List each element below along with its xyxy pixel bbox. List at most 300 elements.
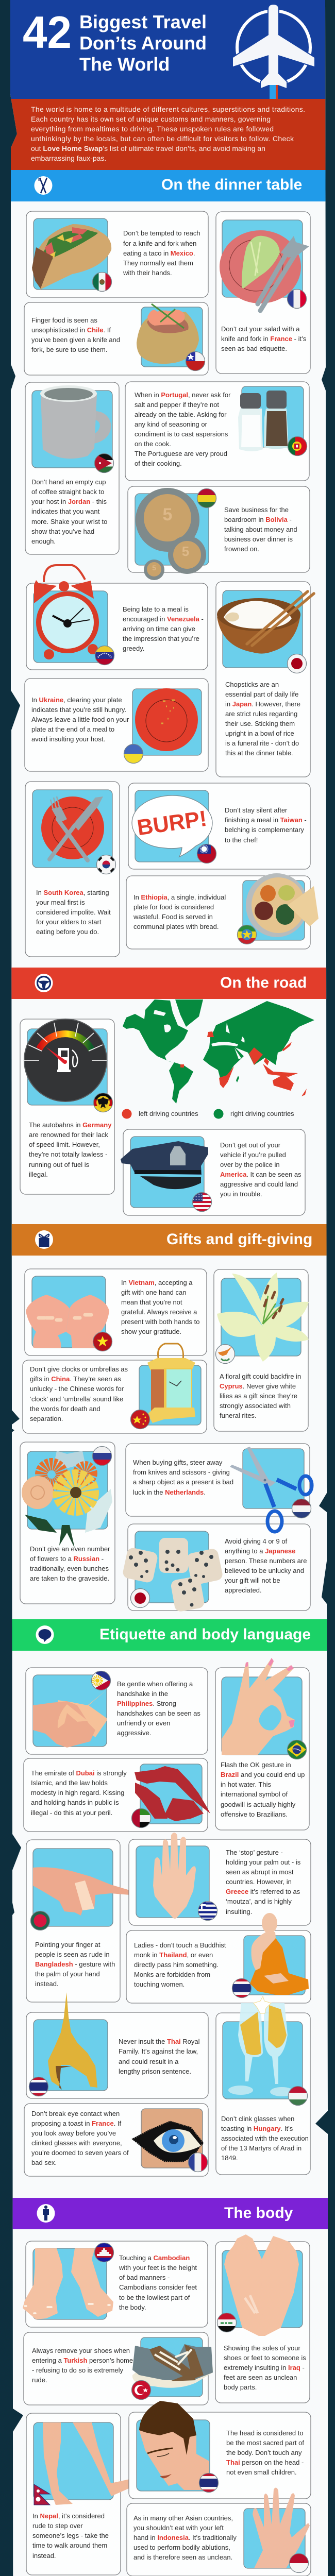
heading: Etiquette and body language: Etiquette and body language [99, 1626, 311, 1643]
text: A floral gift could backfire in [220, 1372, 301, 1380]
text: lengthy prison sentence. [119, 2067, 191, 2075]
text: international symbol of [221, 1790, 288, 1798]
text: The emirate of Dubai is strongly [31, 1769, 127, 1777]
text: - refusing to do so is extremely [32, 2366, 124, 2374]
text: associated with the execution [221, 2134, 309, 2142]
text: of bad manners - [119, 2274, 170, 2281]
text: their use. Sticking them [225, 720, 295, 727]
text: with their hands. [123, 269, 172, 277]
text: handshake in the [117, 1690, 168, 1698]
icon: police cap [121, 1141, 208, 1189]
text: Touching a Cambodian [119, 2254, 190, 2262]
card: Turkey [24, 2332, 213, 2405]
flag: Cyprus [215, 1344, 235, 1364]
text: you’re doomed to seven years of [31, 2149, 129, 2157]
text: are renowned for their lack [29, 1131, 108, 1139]
text: The head is considered to [226, 2429, 304, 2437]
card: Portugal [125, 382, 309, 481]
text: lilies as a gift since they’re [220, 1392, 297, 1400]
icon: coins [136, 488, 206, 580]
icon: lily [217, 1273, 309, 1362]
text: they’re not totally lawless - [29, 1150, 107, 1158]
flag: Japan [130, 1588, 150, 1608]
text: Thai person on the head - [226, 2459, 304, 2466]
text: be the most sacred part of [226, 2439, 304, 2447]
text: Don’t hand an empty cup [31, 478, 106, 486]
text: your meal first is [36, 899, 85, 906]
text: are strict rules regarding [225, 710, 297, 718]
text: your gift will not be [225, 1577, 280, 1584]
icon: coins: 5 [152, 564, 156, 572]
icon: plate with crossed cutlery [41, 796, 104, 860]
card: Japan dice [122, 1524, 310, 1613]
card: Cyprus [214, 1269, 309, 1431]
text: in Japan. However, there [225, 700, 300, 708]
text: aggressive. [117, 1729, 151, 1737]
text: ‘moutza’, and is highly [226, 1897, 292, 1905]
flag: Ethiopia [237, 925, 257, 944]
text: Never insult the Thai Royal [119, 2038, 200, 2045]
text: separation. [30, 1415, 63, 1422]
text: Cambodians consider feet [119, 2283, 197, 2291]
flag: France [188, 2153, 208, 2172]
title [23, 7, 207, 75]
heading: Gifts and gift-giving [35, 1230, 312, 1249]
text: instead. [32, 2552, 56, 2560]
icon: lipstick kiss [135, 1766, 210, 1821]
text: The Portuguese are very proud [135, 450, 227, 457]
text: grateful. Always receive a [121, 1308, 197, 1316]
text: knife and fork in France - it’s [221, 335, 306, 343]
icon: fuel gauge [24, 1019, 107, 1101]
text: Don’t get out of your [220, 1141, 281, 1149]
flag: Thailand [29, 2077, 48, 2096]
text: seen as bad etiquette. [221, 345, 287, 352]
text: and holding hands in public is [31, 1799, 119, 1806]
card: Mexico [26, 211, 208, 297]
card: Cambodia [23, 2241, 208, 2327]
text: any kind of seasoning or [135, 420, 208, 428]
text: extremely insulting in Iraq - [224, 2364, 305, 2371]
icon: bread bowl [137, 304, 199, 364]
text: In Vietnam, accepting a [121, 1279, 193, 1286]
flag: Turkey [131, 2380, 151, 2400]
card: America [121, 1129, 305, 1215]
text: encouraged in Venezuela - [123, 615, 204, 623]
text: boardroom in Bolivia - [224, 516, 292, 523]
text: considered impolite. Wait [36, 908, 111, 916]
flag: Greece [198, 1901, 217, 1921]
flag: Portugal [288, 436, 307, 456]
text: They normally eat them [123, 259, 193, 267]
text: from knives and scissors - giving [133, 1468, 230, 1476]
icon: plane peace symbol [233, 5, 314, 99]
text: a sharp object as a present is bad [133, 1478, 233, 1486]
icon: shoes [132, 2344, 213, 2388]
legend: right driving: right driving countries [230, 1110, 294, 1117]
flag: Netherlands [292, 1499, 311, 1518]
text: clinked glasses with everyone, [31, 2139, 122, 2147]
text: and is therefore seen as unclean. [133, 2553, 232, 2561]
text: goodwill is actually highly [221, 1801, 296, 1808]
intro text: embarrassing faux-pas. [31, 154, 106, 162]
text: over by the police in [220, 1161, 280, 1168]
text: offensive to Brazilians. [221, 1810, 288, 1818]
text: illegal - do this at your peril. [31, 1809, 112, 1817]
text: condiment is to cast aspersions [135, 430, 228, 438]
text: unsophisticated in Chile. If [31, 326, 111, 334]
text: Pointing your finger at [35, 1941, 100, 1948]
flag: UAE [131, 1808, 151, 1828]
text: already on the table. Asking for [135, 411, 227, 418]
text: unfriendly or even [117, 1719, 170, 1727]
text: Being late to a meal is [123, 605, 189, 613]
text: Showing the soles of your [224, 2344, 301, 2352]
text: 1849. [221, 2154, 238, 2162]
text: person. These numbers are [225, 1557, 307, 1565]
icon: pointing hand [33, 1867, 131, 1916]
flag: Vietnam [93, 1332, 112, 1351]
icon: OK hand gesture [222, 1658, 295, 1755]
text: Islamic, and the law holds [31, 1779, 108, 1787]
text: believed to be unlucky and [225, 1567, 304, 1574]
text: illegal. [29, 1171, 48, 1178]
text: with your feet is the height [119, 2264, 197, 2272]
card: Jordan [25, 382, 119, 554]
text: mean that you’re not [121, 1298, 182, 1306]
text: of speed limit. However, [29, 1141, 100, 1148]
text: frowned on. [224, 545, 259, 553]
flag: France [287, 289, 307, 309]
text: insulting. [226, 1908, 252, 1916]
card: Russia flowers [20, 1442, 115, 1604]
text: eating a taco in Mexico. [123, 249, 195, 257]
text: Family. It’s against the law, [119, 2047, 198, 2055]
text: Don’t stay silent after [225, 806, 288, 814]
card: France toast [24, 2104, 208, 2176]
text: As in many other Asian countries, [133, 2514, 233, 2522]
card: Germany [20, 1019, 114, 1194]
heading: The body: The body [224, 2205, 293, 2222]
text: When in Portugal, never ask for [135, 391, 230, 399]
text: anything to a Japanese [225, 1547, 295, 1555]
text: funeral rites. [220, 1412, 257, 1419]
flag: Taiwan [197, 844, 216, 863]
card: Japan chopsticks [216, 582, 314, 777]
text: rude. [32, 2376, 47, 2384]
text: Greece it’s referred to as [226, 1888, 300, 1895]
card: Bolivia [128, 486, 310, 580]
text: proposing a toast in France. If [31, 2120, 121, 2127]
text: this at the dinner table. [225, 749, 293, 757]
text: show that you’ve had [31, 528, 94, 535]
text: finishing a meal in Taiwan - [225, 816, 307, 824]
text: the body. Don’t touch any [226, 2449, 302, 2456]
text: strongly associated with [220, 1402, 291, 1410]
icon: dice [122, 1538, 224, 1613]
flag: Thailand [199, 2473, 219, 2493]
icon: monk [250, 1913, 309, 1995]
text: more. Shake your wrist to [31, 518, 107, 526]
text: feet are seen as unclean [224, 2374, 297, 2381]
text: Avoid giving 4 or 9 of [225, 1537, 288, 1545]
card: Brazil [215, 1658, 309, 1830]
flag: Bangladesh [30, 1911, 50, 1930]
heading: The body [37, 2204, 293, 2223]
card: Vietnam [25, 1269, 207, 1355]
text: running out of fuel is [29, 1161, 90, 1168]
icon: bouquet [22, 1451, 112, 1548]
card: South Korea [25, 782, 120, 957]
text: seen as abrupt in most [226, 1868, 294, 1876]
text: Save business for the [224, 506, 289, 514]
text: plate at the end of a meal to [31, 725, 114, 733]
text: Don’t be tempted to reach [123, 229, 200, 237]
card: Philippines [26, 1668, 208, 1754]
text: luck in the Netherlands. [133, 1488, 206, 1496]
text: Philippines. Strong [117, 1700, 176, 1707]
text: aggressive and could land [220, 1180, 298, 1188]
text: Ladies - don’t touch a Buddhist [134, 1941, 226, 1949]
text: on the cook. [135, 440, 171, 448]
icon: coins: 5 [163, 505, 172, 524]
text: you shouldn’t eat with your left [133, 2524, 224, 2532]
text: touching women. [134, 1980, 185, 1988]
text: the body. [119, 2303, 146, 2311]
text: rude to step over [32, 2522, 83, 2530]
text: Always remove your shoes when [32, 2347, 130, 2354]
icon: empty plate [135, 688, 198, 751]
icon: eye [133, 2122, 203, 2161]
icon: stop hand [153, 1833, 196, 1919]
flag: South Korea [96, 855, 116, 874]
text: fork, be sure to use them. [31, 346, 107, 353]
text: America. It can be seen as [220, 1171, 301, 1178]
title: The World [79, 54, 170, 75]
text: is a funeral rite - don’t do [225, 739, 299, 747]
text: show your gratitude. [121, 1328, 181, 1335]
text: the words for death and [30, 1405, 100, 1413]
legend: right driving [213, 1109, 294, 1119]
icon: alarm clock [34, 565, 99, 659]
text: indicates that you’re still hungry. [31, 706, 126, 714]
flag: China [130, 1410, 150, 1429]
text: used to perform bodily ablutions, [133, 2544, 230, 2551]
icon: scissors (overlaps two cards) [230, 1447, 312, 1532]
flag: Bolivia [197, 488, 216, 508]
text: to be the lowliest part of [119, 2294, 190, 2301]
intro text: unthinkingly by the locals, but can often be difficult for visitors to follow. Check [31, 134, 294, 143]
icon: taco [32, 224, 111, 290]
card: Ukraine [25, 679, 208, 771]
card: Greece [129, 1833, 311, 1925]
text: vehicle if you’re pulled [220, 1151, 286, 1159]
text: Don’t give an even number [30, 1545, 110, 1553]
text: Flash the OK gesture in [221, 1761, 291, 1769]
text: The autobahns in Germany [29, 1121, 111, 1129]
card: Ethiopia [126, 873, 319, 949]
icon: left hand [253, 2487, 310, 2568]
text: avoid insulting your host. [31, 735, 105, 743]
text: handshakes can be seen as [117, 1709, 200, 1717]
flag: Philippines [91, 1671, 111, 1690]
card: China clocks [23, 1344, 207, 1433]
text: the palm of your hand [35, 1970, 100, 1978]
text: arriving on time can give [123, 625, 195, 633]
card: Netherlands [126, 1444, 310, 1516]
text: someone’s legs - take the [32, 2532, 109, 2539]
text: enough. [31, 537, 56, 545]
card: Taiwan [128, 783, 310, 869]
text: time to walk around them [32, 2541, 107, 2549]
heading: On the dinner table [34, 176, 302, 195]
text: body parts. [224, 2383, 257, 2391]
intro text: everything from mealtimes to driving. These unspoken rules are followed [31, 125, 274, 133]
intro text: Each country has its own set of unique customs and manners, governing [31, 115, 271, 123]
icon: soles of feet [224, 2234, 299, 2336]
flag: Thailand [232, 1978, 252, 1998]
flag: Brazil [287, 1740, 307, 1759]
text: In South Korea, starting [36, 889, 109, 896]
flag: Jordan [94, 453, 114, 473]
text: modesty in high regard. Kissing [31, 1789, 124, 1797]
text: In Nepal, it’s considered [32, 2512, 105, 2520]
text: of the 13 Martyrs of Arad in [221, 2144, 301, 2152]
text: to the chef! [225, 836, 258, 844]
flag: Nepal [34, 2484, 50, 2505]
text: gifts in China. They’re seen as [30, 1375, 121, 1383]
card: Nepal [26, 2413, 135, 2575]
card: France salad [216, 212, 310, 374]
text: you’ve been given a knife and [31, 336, 120, 344]
intro text: out Love Home Swap’s list of ultimate travel don’ts, and avoid making an [31, 144, 265, 152]
text: essential part of daily life [225, 690, 298, 698]
title: Don’ts Around [79, 32, 207, 54]
text: for a knife and fork when [123, 240, 196, 247]
card: Chile [24, 302, 208, 375]
icon: legs [43, 2422, 135, 2505]
text: In Ukraine, clearing your plate [31, 696, 122, 704]
icon: carriage clock [147, 1344, 195, 1423]
card: Iraq [215, 2234, 310, 2403]
heading: On the dinner table: On the dinner table [161, 176, 302, 193]
card: Thailand monk [126, 1913, 311, 2003]
text: entering a Turkish person’s home [32, 2357, 133, 2364]
card: Thai Royal Family [26, 1992, 208, 2098]
text: hand in Indonesia. It’s traditionally [133, 2534, 237, 2541]
text: communal plates with bread. [133, 923, 219, 930]
flag: Ukraine [124, 744, 143, 764]
card: Venezuela [26, 565, 208, 670]
text: countries. However, in [226, 1878, 292, 1886]
card: Bangladesh [26, 1840, 131, 2002]
text: monk in Thailand, or even [134, 1951, 213, 1959]
card: Hungary [216, 1996, 310, 2175]
text: of flowers to a Russian - [30, 1555, 104, 1563]
icon: cupped hands [26, 1295, 109, 1348]
icon: golden temple [48, 1992, 97, 2090]
text: holding your palm out - is [226, 1858, 301, 1866]
flag: Chile [186, 351, 205, 371]
text: The ‘stop’ gesture - [226, 1849, 283, 1856]
card: Dubai [24, 1758, 210, 1832]
text: Finger food is seen as [31, 316, 97, 324]
text: you look away before you’ve [31, 2129, 116, 2137]
flag: Indonesia [289, 2553, 309, 2573]
heading: On the road: On the road [220, 974, 307, 991]
text: in hot water. This [221, 1781, 272, 1788]
text: directly pass him something. [134, 1961, 219, 1969]
title: Biggest Travel [79, 11, 207, 32]
text: salt and pepper if they’re not [135, 401, 219, 409]
flag: Venezuela [95, 646, 114, 665]
text: traditionally, even bunches [30, 1565, 109, 1572]
icon: speech bubble BURP: BURP! [136, 806, 208, 840]
card: Thai head [129, 2401, 311, 2499]
icon: man's head [139, 2401, 209, 2490]
flag: USA [192, 1192, 212, 1212]
text: Be gentle when offering a [117, 1680, 193, 1688]
icon: salt and pepper [238, 391, 289, 451]
text: Cyprus. Never give white [220, 1382, 296, 1390]
text: for your elders to start [36, 918, 102, 926]
title: 42 [23, 7, 72, 58]
legend: left driving: left driving countries [139, 1110, 198, 1117]
text: belching is complementary [225, 826, 304, 834]
text: plate for food is considered [133, 903, 214, 911]
text: greedy. [123, 645, 144, 652]
icon: rice bowl [217, 591, 314, 654]
flag: Hungary [288, 2086, 308, 2106]
text: ‘clock’ and ‘umbrella’ sound like [30, 1395, 123, 1403]
text: of their cooking. [135, 460, 182, 467]
legend: left driving [122, 1109, 198, 1119]
text: and could result in a [119, 2058, 179, 2065]
icon: speech bubble BURP [132, 795, 212, 857]
text: present with both hands to [121, 1318, 200, 1326]
text: Don’t give clocks or umbrellas as [30, 1365, 128, 1373]
text: not even small children. [226, 2468, 297, 2476]
text: wasteful. Food is served in [133, 913, 213, 921]
icon: ethiopian platter [246, 873, 319, 937]
text: Brazil and you could end up [221, 1771, 305, 1778]
text: your host in Jordan - this [31, 498, 107, 505]
text: Chopsticks are an [225, 681, 279, 688]
text: Always leave a little food on your [31, 716, 129, 723]
text: In Ethiopia, a single, individual [133, 893, 226, 901]
heading: Gifts and gift-giving: Gifts and gift-giving [166, 1231, 312, 1248]
text: indicates that you want [31, 507, 100, 515]
icon: salad plate [220, 230, 309, 311]
world map [123, 999, 314, 1104]
heading: On the road [35, 974, 307, 992]
text: people is seen as rude in [35, 1951, 110, 1958]
text: Don’t clink glasses when [221, 2115, 294, 2123]
text: gift with one hand can [121, 1289, 186, 1296]
text: Don’t cut your salad with a [221, 325, 300, 333]
icon: feet [23, 2248, 113, 2319]
flag: Russia [92, 1446, 112, 1466]
text: instead. [35, 1980, 59, 1988]
text: shoes or feet to someone is [224, 2354, 306, 2362]
flag: Mexico [92, 272, 112, 292]
text: you in trouble. [220, 1190, 262, 1198]
text: When buying gifts, steer away [133, 1459, 223, 1466]
text: Don’t break eye contact when [31, 2110, 120, 2117]
text: appreciated. [225, 1586, 262, 1594]
text: business over dinner is [224, 535, 293, 543]
text: talking about money and [224, 526, 297, 533]
